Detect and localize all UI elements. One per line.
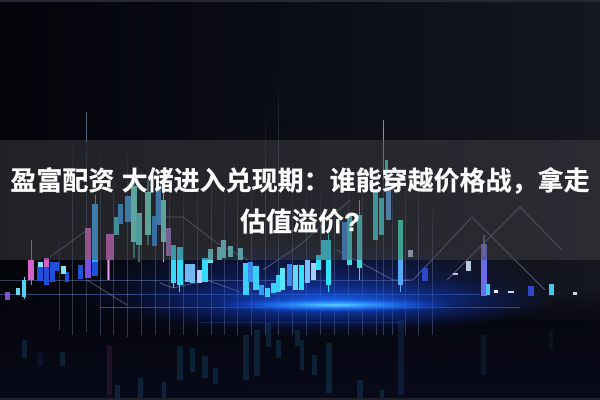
candles: cyan and teal group	[38, 262, 66, 274]
horizontal light beams	[0, 274, 555, 330]
title line 1: 盈富配资 大储进入兑现期：谁能穿越价格战，拿走	[10, 166, 590, 196]
vertical grid lines	[59, 70, 433, 337]
candles: pink group	[28, 228, 114, 285]
candlestick chart	[5, 112, 577, 300]
mirror reflection of candles	[22, 320, 553, 400]
candles: pale pink wick	[108, 260, 110, 280]
spire tower	[86, 112, 388, 190]
translucent title band with headline	[0, 140, 600, 260]
candles: blue and violet group	[37, 260, 98, 285]
trend lines	[50, 200, 562, 305]
title line 2: 估值溢价?	[240, 207, 360, 237]
